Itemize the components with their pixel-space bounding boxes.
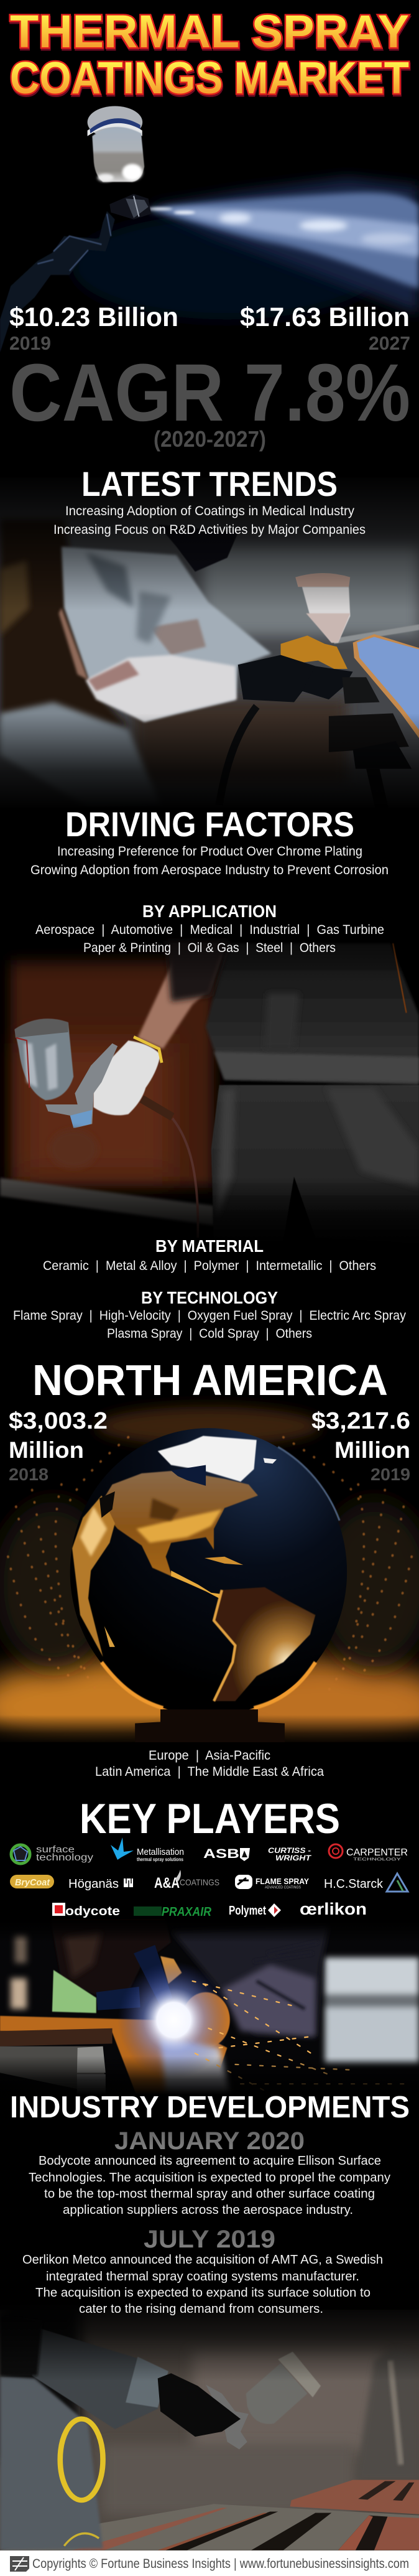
footer	[0, 2550, 419, 2576]
blurred fluorescent lights	[11, 1935, 419, 2063]
panel: spray gun photo	[0, 106, 419, 353]
orange floor glow	[0, 1407, 419, 1754]
glowing particles	[8, 1437, 412, 1690]
clamps and hose	[219, 677, 412, 816]
orange spray gun	[281, 635, 348, 669]
segment: by application	[35, 902, 384, 955]
heading: north america: NORTH AMERICA	[32, 1356, 388, 1404]
development: July 2019: integrated thermal spray coating systems manufacturer.	[46, 2270, 359, 2284]
stat: 2019 value	[9, 302, 178, 354]
panel: painter arm photo	[0, 2300, 419, 2551]
welder hood and glove	[51, 1920, 182, 2013]
spray gun body and gloved hand	[0, 194, 151, 353]
logo: Curtiss-Wright: CURTISS -	[268, 1847, 311, 1855]
development: July 2019: The acquisition is expected to expand its surface solution to	[35, 2286, 371, 2300]
logo: Carpenter Technology	[329, 1844, 408, 1862]
logo: surface technology	[11, 1844, 93, 1864]
gun	[206, 2385, 249, 2450]
logo: BryCoat: BryCoat	[15, 1877, 50, 1888]
logo: Flame Spray: ADVANCED COATINGS	[265, 1886, 301, 1890]
logo: Metallisation: Metallisation	[137, 1847, 184, 1857]
air hose	[142, 1099, 198, 1238]
logo: ASB: ASB	[203, 1847, 239, 1861]
worn spray gun	[15, 1019, 117, 1169]
panel: painter with gloved hand photo	[0, 888, 419, 1309]
logo: Carpenter Technology: CARPENTER	[346, 1847, 408, 1858]
logo: Flame Spray	[235, 1875, 309, 1890]
development: July 2019	[22, 2226, 383, 2316]
globe sphere	[70, 1428, 347, 1716]
heading: key players: KEY PLAYERS	[80, 1795, 340, 1842]
spray cloud	[72, 178, 419, 319]
welder jacket	[171, 1926, 329, 2037]
stat: North America 2018: $3,003.2	[9, 1408, 108, 1434]
black glove	[158, 2373, 241, 2437]
other regions: Europe | Asia-Pacific	[149, 1748, 270, 1763]
logo: Bodycote: odycote	[65, 1905, 120, 1918]
segment: by material: BY MATERIAL	[155, 1236, 264, 1256]
heading: latest trends: LATEST TRENDS	[81, 464, 338, 503]
title	[10, 6, 410, 105]
logo: Curtiss-Wright	[268, 1847, 312, 1862]
other regions	[0, 1742, 419, 1786]
heading: industry developments: INDUSTRY DEVELOPMENTS	[10, 2091, 410, 2124]
logo: BryCoat	[10, 1875, 54, 1888]
segment: by material: Ceramic | Metal & Alloy | Polymer | Intermetallic | Others	[43, 1259, 376, 1273]
spray cup	[246, 2351, 321, 2424]
company logos	[10, 1837, 408, 1919]
weld flash	[117, 1962, 230, 2078]
development: January 2020: application suppliers across the aerospace industry.	[63, 2203, 353, 2217]
panel: industry developments text background	[0, 2094, 419, 2281]
logo: A&A Coatings	[154, 1870, 219, 1892]
logo: Oerlikon: œrlikon	[300, 1900, 367, 1918]
heading: latest trends	[53, 464, 366, 537]
landmass: Arctic and Greenland	[158, 1436, 277, 1482]
welding torch	[134, 1945, 172, 2006]
development: January 2020: Bodycote announced its agreement to acquire Ellison Surface	[39, 2154, 381, 2168]
logo: Hoganas: Höganäs	[68, 1877, 119, 1891]
sparks	[193, 1981, 407, 2092]
segment: by technology: BY TECHNOLOGY	[141, 1288, 278, 1307]
stat: North America 2019: 2019	[371, 1465, 410, 1484]
worker respirator	[158, 525, 238, 572]
logo: Metallisation	[111, 1837, 184, 1862]
market size stats	[9, 302, 410, 452]
logo: surface technology: technology	[36, 1852, 93, 1863]
development: January 2020: Technologies. The acquisition is expected to propel the company	[29, 2171, 390, 2185]
segment: by technology: Plasma Spray | Cold Spray | Others	[107, 1327, 312, 1341]
segment: by technology	[13, 1288, 406, 1341]
sleeve	[0, 2315, 168, 2429]
logo: Carpenter Technology: TECHNOLOGY	[353, 1858, 401, 1862]
worker suit	[0, 2376, 103, 2550]
stat: North America 2019	[311, 1408, 410, 1484]
worker trousers	[211, 1085, 419, 1243]
logo: Polymet: Polymet	[229, 1904, 266, 1918]
white glove	[93, 1037, 162, 1115]
heading: driving factors: Increasing Preference for Product Over Chrome Plating	[57, 844, 362, 859]
red drying rack	[290, 2480, 419, 2514]
heading: driving factors: Growing Adoption from Aerospace Industry to Prevent Corrosion	[30, 863, 389, 877]
grey slatted table	[0, 2504, 419, 2550]
panel: worker spraying photo	[0, 472, 419, 827]
development: July 2019: cater to the rising demand from consumers.	[79, 2302, 323, 2316]
stat: North America 2019: $3,217.6	[311, 1408, 410, 1434]
background figure	[356, 2348, 419, 2480]
stat: 2027 value	[240, 302, 410, 354]
logo: Praxair: PRAXAIR	[162, 1905, 211, 1919]
heading: latest trends: Increasing Adoption of Coatings in Medical Industry	[65, 504, 354, 518]
development: January 2020: to be the top-most thermal spray and other surface coating	[44, 2187, 375, 2201]
stat: North America 2018	[9, 1408, 108, 1484]
bare forearm	[137, 941, 230, 1049]
title: THERMAL SPRAY	[10, 6, 409, 57]
development: January 2020	[29, 2127, 390, 2217]
panel: welding photo	[0, 1920, 419, 2098]
stat: 2019 value: 2019	[9, 332, 51, 354]
spray gun cup	[88, 106, 144, 182]
stat: North America 2018: Million	[9, 1437, 84, 1463]
title: THERMAL SPRAY	[11, 7, 410, 59]
landmass: South America	[214, 1587, 315, 1701]
icon: Fortune Business Insights logo	[10, 2556, 29, 2572]
heading: driving factors: DRIVING FACTORS	[65, 805, 354, 844]
worker suit	[0, 547, 271, 808]
heading: driving factors	[30, 805, 389, 877]
stat: North America 2019: Million	[334, 1437, 410, 1463]
heading: latest trends: Increasing Focus on R&D Activities by Major Companies	[53, 523, 366, 537]
landmass: Europe and Africa limb	[72, 1491, 115, 1656]
logo: ASB	[203, 1847, 250, 1861]
logo: Flame Spray: FLAME SPRAY	[256, 1877, 309, 1886]
segment: by application: Paper & Printing | Oil & Gas | Steel | Others	[83, 941, 336, 955]
logo: H.C.Starck: H.C.Starck	[324, 1877, 384, 1891]
stat: 2027 value: $17.63 Billion	[240, 302, 410, 332]
development: July 2019: JULY 2019	[144, 2226, 275, 2253]
other regions: Latin America | The Middle East & Africa	[95, 1765, 324, 1779]
steel table	[0, 1992, 230, 2095]
stat: CAGR: (2020-2027)	[154, 426, 266, 452]
logo: Bodycote	[52, 1903, 120, 1918]
logo: Praxair	[134, 1905, 211, 1919]
landmass: North America	[99, 1465, 258, 1598]
segment: by material	[43, 1236, 376, 1273]
globe stand	[135, 1709, 285, 1742]
yellow hose ring	[60, 2419, 103, 2546]
development: January 2020: JANUARY 2020	[114, 2127, 305, 2155]
logo: surface technology: surface	[36, 1844, 75, 1855]
stat: 2019 value: $10.23 Billion	[9, 302, 178, 332]
black gloves	[238, 655, 353, 702]
development: July 2019: Oerlikon Metco announced the acquisition of AMT AG, a Swedish	[22, 2253, 383, 2267]
paint cup	[295, 573, 350, 643]
logo: Metallisation: thermal spray solutions	[137, 1857, 183, 1862]
blue board	[353, 634, 419, 739]
grey rail	[0, 1178, 214, 1225]
stat: North America 2018: 2018	[9, 1465, 48, 1484]
logo: A&A Coatings: A&A	[154, 1875, 180, 1892]
logo: A&A Coatings: COATINGS	[180, 1877, 219, 1887]
segment: by application: Aerospace | Automotive | Medical | Industrial | Gas Turbine	[35, 923, 384, 937]
worker vest	[206, 943, 419, 1085]
segment: by application: BY APPLICATION	[142, 902, 277, 921]
panel: globe illustration	[0, 1407, 419, 1754]
stat: 2027 value: 2027	[369, 332, 410, 354]
logo: Curtiss-Wright: WRIGHT	[275, 1854, 312, 1862]
logo: H.C.Starck	[324, 1874, 408, 1892]
